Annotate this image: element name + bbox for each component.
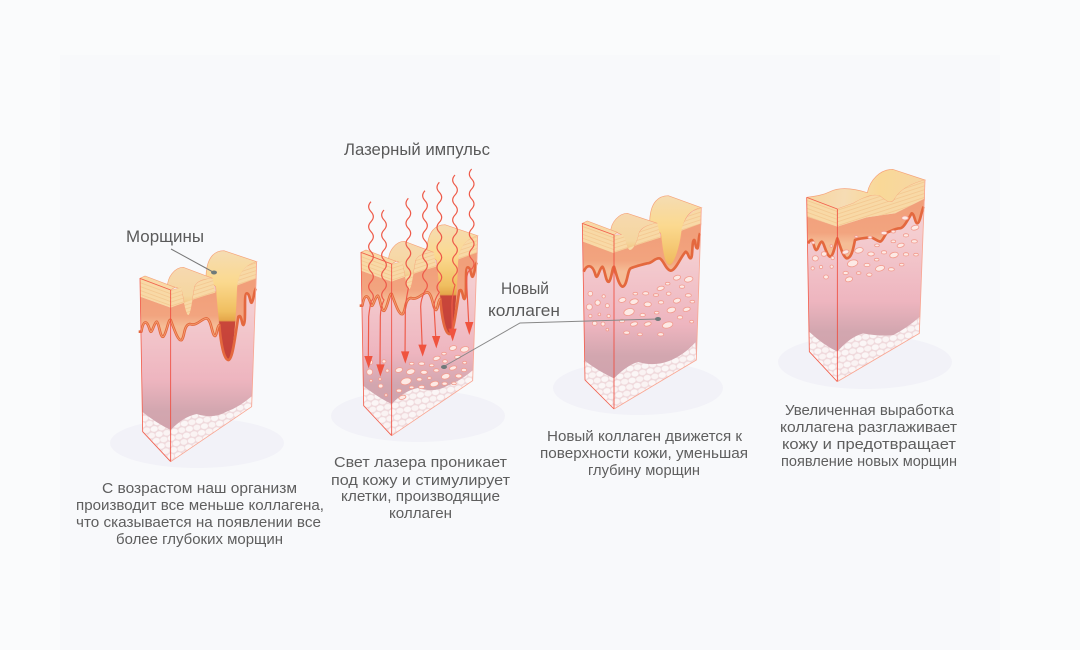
caption 1: С возрастом наш организм: [102, 481, 297, 497]
caption 3: глубину морщин: [588, 463, 700, 479]
caption 2: коллаген: [389, 506, 452, 522]
caption 4: Увеличенная выработка: [785, 403, 955, 419]
caption 3: Новый коллаген движется к: [547, 429, 743, 445]
label: new collagen with leader lines: коллаген: [488, 301, 560, 320]
caption 1: производит все меньше коллагена,: [76, 498, 324, 514]
skin block 2: laser treatment: [360, 225, 478, 436]
block 2 shadow: [331, 390, 505, 442]
caption 1: что сказывается на появлении все: [76, 515, 321, 531]
new collagen cells, block 4: [811, 216, 919, 283]
label: new collagen with leader lines: [441, 279, 661, 369]
caption 1: [76, 481, 324, 548]
new collagen cells, block 3: [586, 274, 695, 336]
caption 2: Свет лазера проникает: [334, 455, 507, 471]
label: wrinkles: Морщины: [126, 227, 204, 246]
block 1 shadow: [110, 418, 284, 468]
block 4 shadow: [778, 335, 952, 389]
label: wrinkles: [126, 227, 217, 274]
caption 3: [540, 429, 748, 479]
caption 4: коллагена разглаживает: [780, 420, 957, 436]
new collagen cells, block 2: [367, 345, 470, 400]
caption 4: [780, 403, 957, 470]
caption 4: кожу и предотвращает: [782, 437, 956, 453]
block 3 shadow: [553, 361, 723, 415]
caption 3: поверхности кожи, уменьшая: [540, 446, 748, 462]
laser rays with arrows: [364, 169, 474, 377]
heading: laser pulse: Лазерный импульс: [344, 140, 490, 159]
caption 2: клетки, производящие: [341, 489, 500, 505]
label: new collagen with leader lines: Новый: [501, 279, 549, 298]
caption 2: [331, 455, 510, 522]
skin block 1: deep wrinkles: [139, 251, 257, 462]
skin block 3: collagen rising: [582, 196, 701, 409]
background panel: [60, 55, 1000, 650]
caption 1: более глубоких морщин: [116, 532, 283, 548]
caption 4: появление новых морщин: [781, 454, 957, 470]
caption 2: под кожу и стимулирует: [331, 473, 510, 489]
skin block 4: smoothed skin: [807, 169, 925, 382]
